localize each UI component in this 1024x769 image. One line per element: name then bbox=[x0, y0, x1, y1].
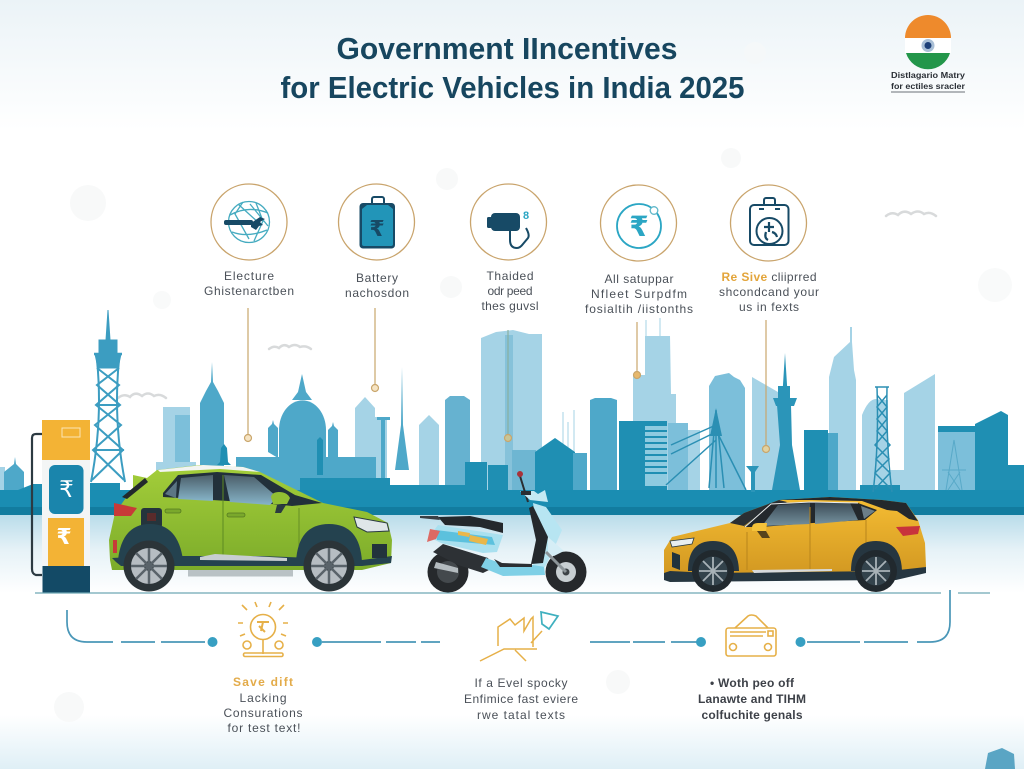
city skyline bbox=[0, 310, 1024, 515]
label: badge: Re Sive cliiprred bbox=[722, 270, 816, 284]
icon circle 3: charging plug: 8 bbox=[523, 210, 529, 222]
label: electric grid: Electure bbox=[224, 269, 274, 283]
label: savings: Consurations bbox=[224, 706, 302, 720]
label: savings bbox=[224, 675, 302, 735]
label: battery: Battery bbox=[356, 271, 398, 285]
logo: India flag emblem bbox=[891, 15, 966, 92]
title bbox=[280, 31, 744, 105]
label: fast bbox=[464, 676, 578, 722]
yellow car bbox=[664, 497, 926, 592]
icon circle 3: charging plug bbox=[470, 184, 546, 260]
electric scooter bbox=[420, 471, 586, 592]
logo: India flag emblem: Distlagario Matry bbox=[891, 70, 965, 80]
lattice pylon bbox=[873, 387, 892, 492]
label: savings: for test text! bbox=[228, 721, 300, 735]
label: charging: odr peed bbox=[488, 284, 532, 298]
light buildings back layer bbox=[0, 327, 935, 495]
label: benefits: Lanawte and TIHM bbox=[698, 692, 806, 706]
reflection under skyline bbox=[0, 515, 1024, 593]
label: charging bbox=[482, 269, 538, 313]
label: savings: Save dift bbox=[233, 675, 293, 689]
label: electric grid bbox=[204, 269, 294, 298]
charging station bbox=[32, 420, 90, 592]
label: savings: Lacking bbox=[240, 691, 286, 705]
icon circle 4: rupee subsidy bbox=[600, 185, 676, 261]
label: badge: us in fexts bbox=[739, 300, 799, 314]
icon: savings bulb bbox=[238, 602, 288, 656]
icon circle 2: battery bbox=[338, 184, 414, 260]
charging station: ₹ bbox=[56, 524, 72, 549]
label: subsidy bbox=[585, 272, 693, 316]
title: for Electric Vehicles in India 2025 bbox=[280, 70, 744, 105]
cable bridge bbox=[666, 408, 746, 490]
icon circle 5: badge bbox=[730, 185, 806, 261]
label: benefits bbox=[698, 676, 806, 722]
label: battery: nachosdon bbox=[345, 286, 409, 300]
charging station: ₹ bbox=[59, 476, 74, 502]
icon circle 4: rupee subsidy: ₹ bbox=[629, 211, 649, 242]
label: badge bbox=[719, 270, 819, 314]
label: benefits: • Woth peo off bbox=[710, 676, 795, 690]
connector lines bbox=[244, 308, 770, 452]
logo: India flag emblem: for ectiles sracler bbox=[891, 81, 966, 91]
base band bbox=[0, 490, 1024, 507]
title: Government IIncentives bbox=[336, 31, 678, 66]
icon: growth chart arrow bbox=[480, 612, 558, 661]
ground line bbox=[35, 592, 990, 594]
dark spire right bbox=[746, 466, 759, 492]
mid-dark landmarks bbox=[4, 362, 838, 495]
label: badge: shcondcand your bbox=[719, 285, 819, 299]
icon: card reader bbox=[726, 615, 776, 656]
label: battery bbox=[345, 271, 409, 300]
label: fast: rwe tatal texts bbox=[477, 708, 565, 722]
dark buildings bbox=[0, 411, 1024, 495]
left lattice tower bbox=[91, 310, 125, 482]
label: charging: thes guvsl bbox=[482, 299, 538, 313]
label: fast: Enfimice fast eviere bbox=[464, 692, 578, 706]
label: benefits: colfuchite genals bbox=[702, 708, 803, 722]
timeline path bbox=[67, 590, 950, 647]
label: subsidy: All satuppar bbox=[604, 272, 674, 286]
right tower bbox=[772, 353, 800, 490]
clouds bbox=[118, 212, 936, 398]
green car bbox=[109, 465, 392, 592]
label: electric grid: Ghistenarctben bbox=[204, 284, 294, 298]
mid buildings bbox=[156, 335, 976, 492]
distant small tower bbox=[942, 440, 966, 490]
label: charging: Thaided bbox=[486, 269, 534, 283]
label: fast: If a Evel spocky bbox=[474, 676, 568, 690]
icon circle 1: electric grid bbox=[211, 184, 287, 260]
antennas bbox=[563, 318, 660, 452]
label: subsidy: Nfleet Surpdfm bbox=[591, 287, 687, 301]
icon circle 2: battery: ₹ bbox=[369, 216, 385, 241]
label: subsidy: fosialtih /iistonths bbox=[585, 302, 693, 316]
